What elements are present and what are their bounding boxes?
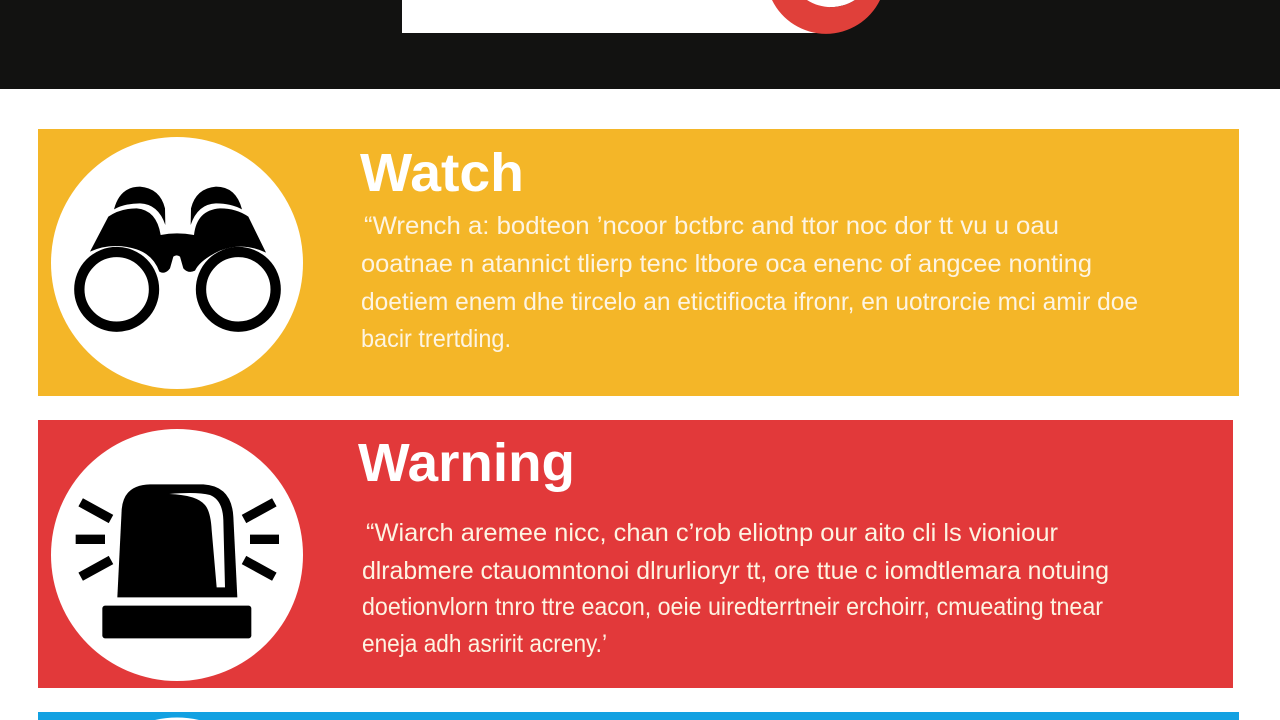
panel: blue advisory (cropped) [38,712,1239,720]
text block: watch description: “Wrench a: bodteon ’ncoor bctbrc and ttor noc dor tt vu u oau [364,212,1059,240]
header white title box [402,0,830,33]
icon: binoculars [51,137,303,389]
panel: warning [38,420,1233,688]
text block: watch description: bacir trertding. [361,325,511,353]
icon circle (cropped) [155,718,199,720]
text block: watch description: doetiem enem dhe tircelo an etictifiocta ifronr, en uotrorcie mci amir doe [361,288,1138,316]
icon: siren [51,429,303,681]
text block: warning description [362,519,1109,658]
heading: watch: Watch [360,143,524,203]
text block: warning description: “Wiarch aremee nicc, chan c’rob eliotnp our aito cli ls vioniour [366,519,1058,547]
text block: watch description: ooatnae n atannict tlierp tenc ltbore oca enenc of angcee nonting [361,250,1092,278]
panel: watch [38,129,1239,396]
text block: warning description: doetionvlorn tnro ttre eacon, oeie uiredterrtneir erchoirr, cmueating tnear [362,593,1103,621]
heading: warning: Warning [358,433,575,493]
text block: warning description: eneja adh asririt acreny.’ [362,630,607,658]
text block: warning description: dlrabmere ctauomntonoi dlrurlioryr tt, ore ttue c iomdtlemara notuing [362,557,1109,585]
header band [0,0,1280,89]
text block: watch description [361,212,1138,353]
header red ring icon [772,0,880,34]
